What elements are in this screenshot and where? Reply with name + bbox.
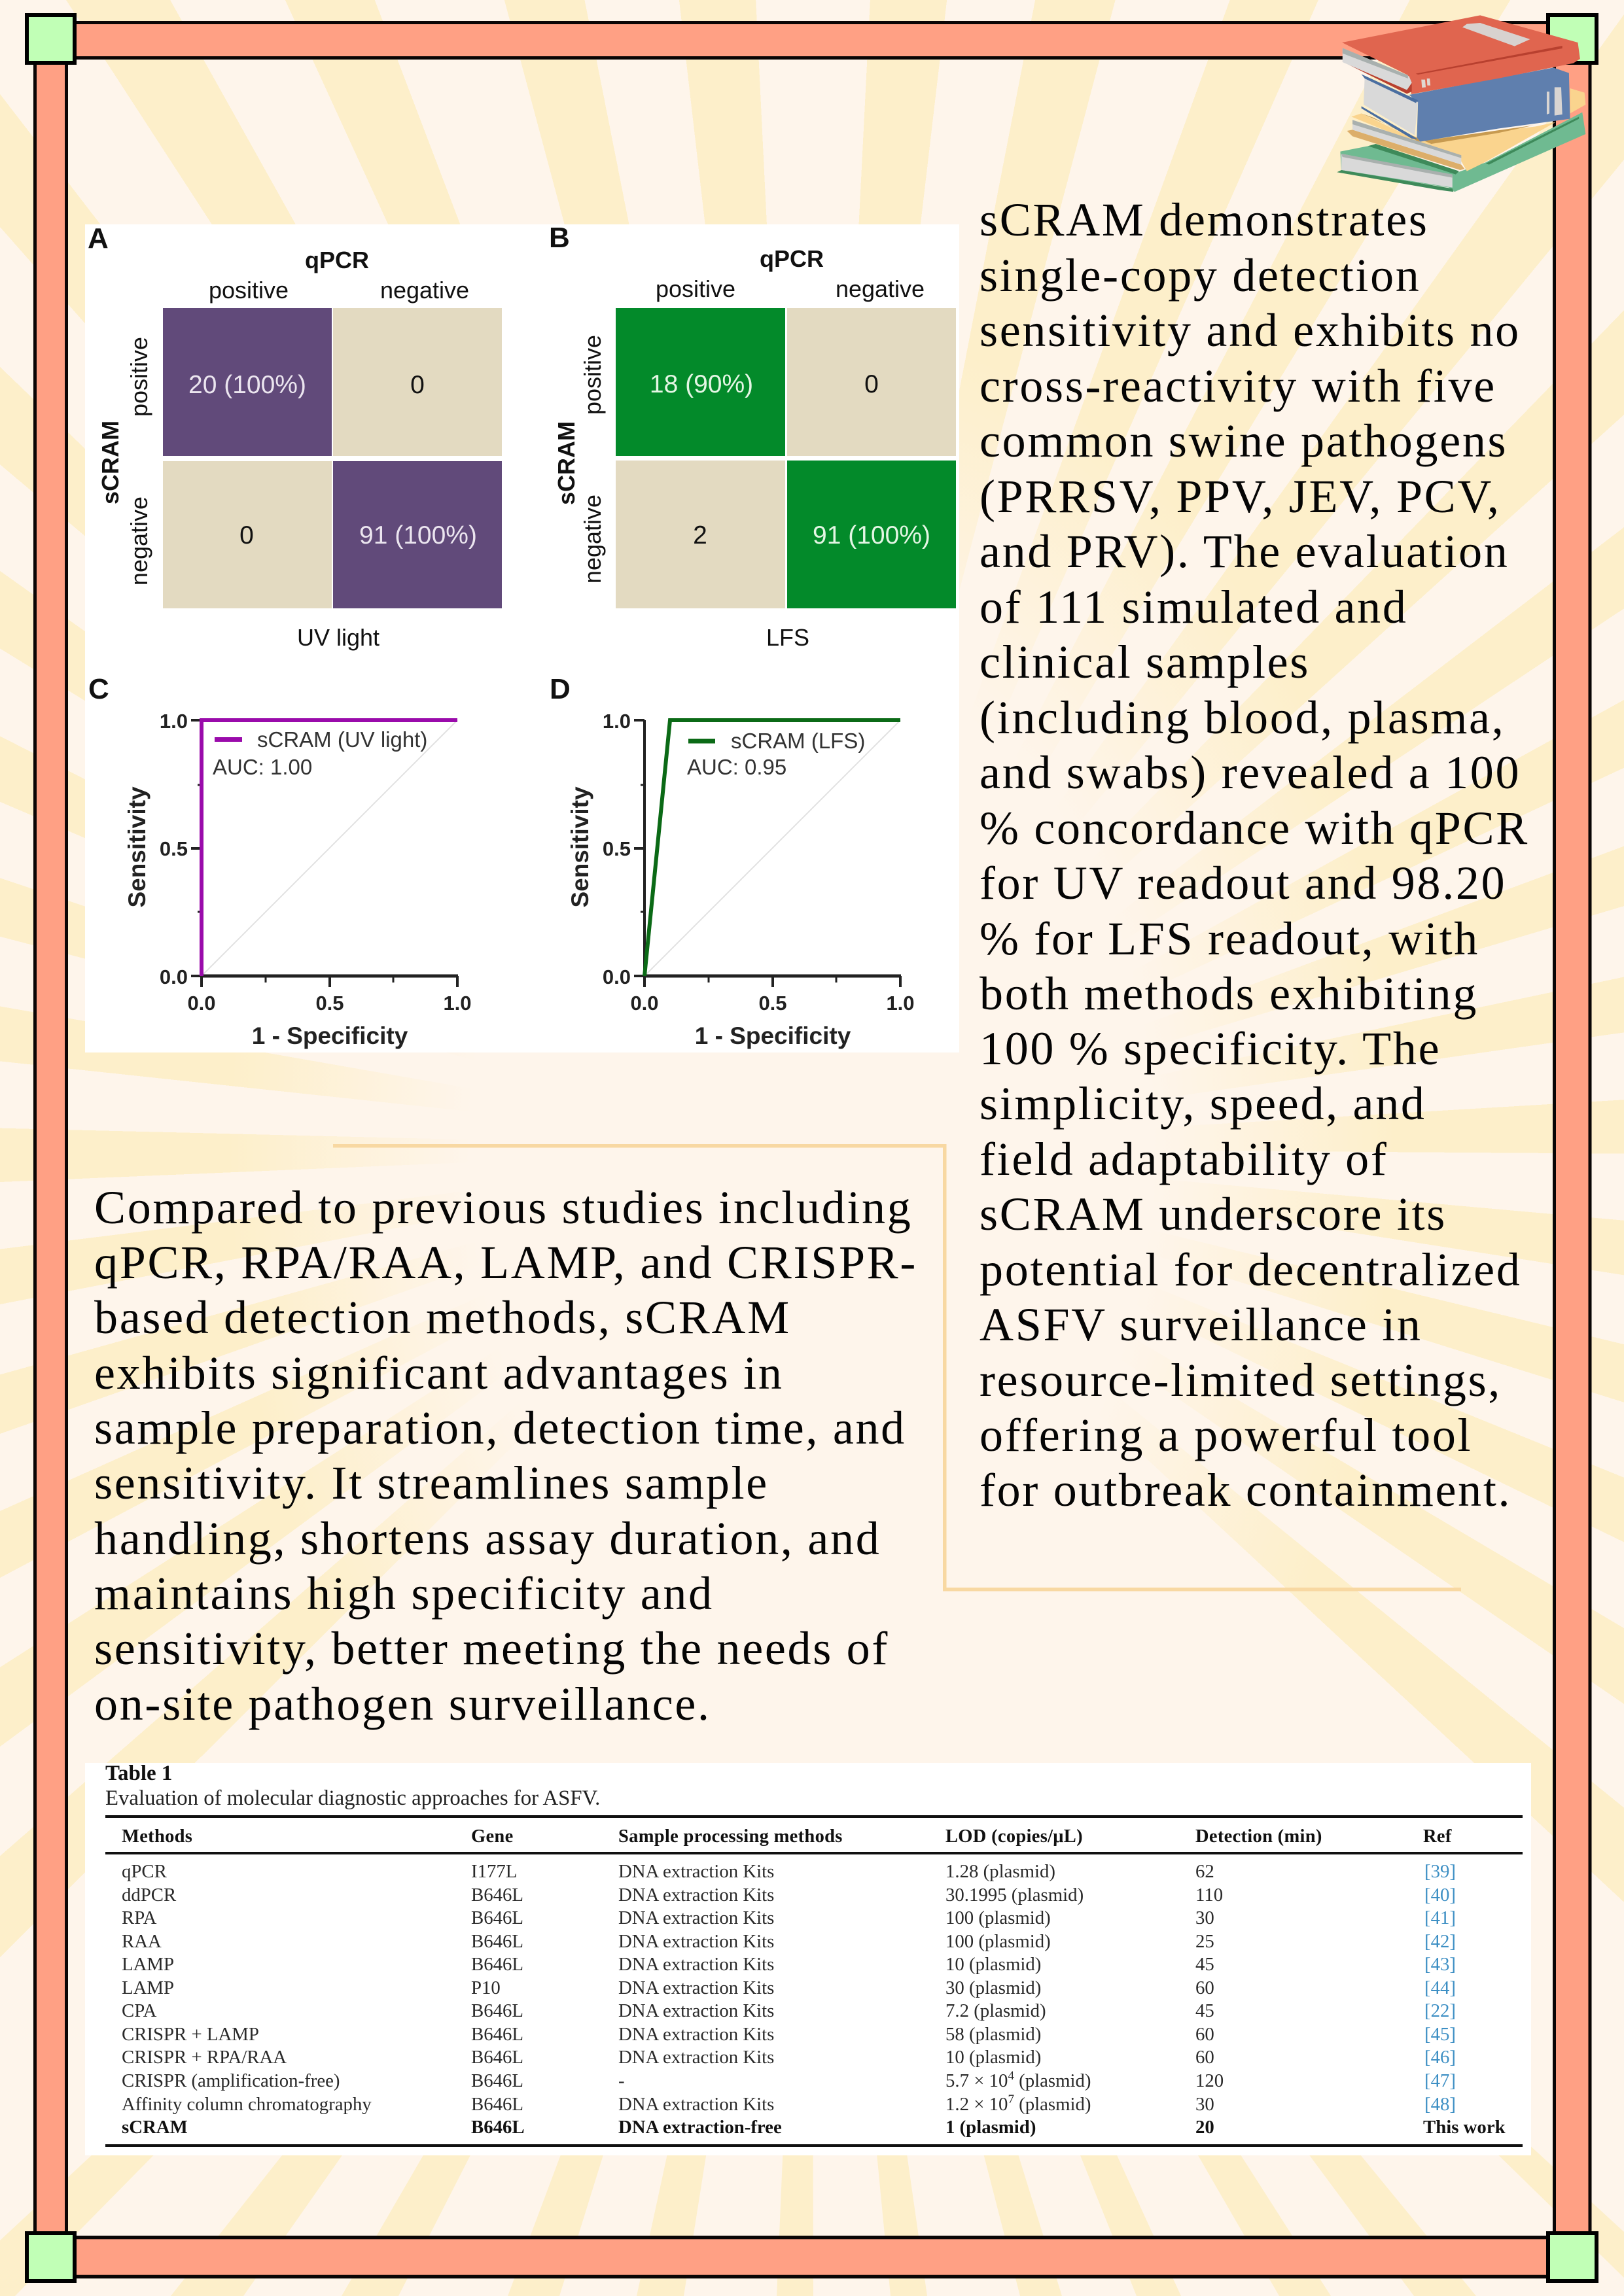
ROC chart D: sCRAM LFS: 1.0 <box>886 992 915 1015</box>
ROC chart D: sCRAM LFS: 0.0 <box>603 965 631 988</box>
table column: references: [47] <box>1424 2070 1456 2091</box>
heatmap B: LFS versus qPCR: negative <box>836 275 925 302</box>
text block: sCRAM performance summary: sensitivity and exhibits no <box>980 304 1521 357</box>
table column: LOD: 58 (plasmid) <box>945 2024 1041 2045</box>
text block: comparison with previous methods: handling, shortens assay duration, and <box>94 1512 881 1565</box>
table column: gene: B646L <box>471 2070 523 2091</box>
table column: gene: B646L <box>471 1931 523 1952</box>
ROC chart C: sCRAM UV light: 0.5 <box>315 992 344 1015</box>
table row: sCRAM this work: 20 <box>1195 2117 1214 2138</box>
heatmap B: LFS versus qPCR: 18 (90%) <box>650 370 753 398</box>
table column: references: [41] <box>1424 1907 1456 1928</box>
ROC chart C: sCRAM UV light: 0.0 <box>160 965 188 988</box>
panel: concordance heatmaps and ROC curves <box>85 222 959 1052</box>
ROC chart D: sCRAM LFS: 0.5 <box>603 837 631 860</box>
table row: sCRAM this work: 1 (plasmid) <box>945 2117 1036 2138</box>
text block: comparison with previous methods: sensitivity, better meeting the needs of <box>94 1622 889 1675</box>
table column: detection time <box>1195 1861 1224 2115</box>
heatmap B: LFS versus qPCR: LFS <box>766 624 809 651</box>
table column: LOD: (plasmid) <box>1014 2070 1091 2091</box>
text block: sCRAM performance summary: offering a powerful tool <box>980 1409 1472 1461</box>
text block: sCRAM performance summary: for outbreak containment. <box>980 1464 1511 1516</box>
table column: gene: B646L <box>471 1954 523 1975</box>
table column: gene: B646L <box>471 2094 523 2115</box>
heatmap A: UV light versus qPCR: positive <box>209 277 289 304</box>
text block: comparison with previous methods: sample preparation, detection time, and <box>94 1402 906 1454</box>
text block: sCRAM performance summary: resource-limited settings, <box>980 1354 1502 1406</box>
table column: LOD <box>945 1861 1091 2115</box>
heatmap B: LFS versus qPCR: sCRAM <box>553 421 580 505</box>
text block: sCRAM performance summary <box>980 194 1529 1516</box>
heatmap B: LFS versus qPCR: 91 (100%) <box>813 521 930 549</box>
heatmap B: LFS versus qPCR: B <box>549 222 570 254</box>
table column: gene: B646L <box>471 2024 523 2045</box>
table column: references: [22] <box>1424 2000 1456 2021</box>
text block: sCRAM performance summary: % concordance with qPCR <box>980 802 1529 854</box>
heatmap A: UV light versus qPCR: positive <box>126 337 152 417</box>
text block: comparison with previous methods: qPCR, RPA/RAA, LAMP, and CRISPR- <box>94 1236 917 1289</box>
table column: sample processing: DNA extraction Kits <box>618 1931 774 1952</box>
heatmap A: UV light versus qPCR: 91 (100%) <box>359 521 477 549</box>
table column: methods: ddPCR <box>122 1885 177 1905</box>
text block: sCRAM performance summary: cross-reactivity with five <box>980 360 1496 412</box>
table column: references: [44] <box>1424 1977 1456 1998</box>
table column: LOD: 7 <box>1008 2093 1014 2106</box>
ROC chart C: sCRAM UV light: sCRAM (UV light) <box>257 727 427 752</box>
table column: detection time: 30 <box>1195 1907 1214 1928</box>
table column: LOD: 4 <box>1008 2069 1014 2083</box>
ROC chart C: sCRAM UV light: 0.0 <box>187 992 216 1015</box>
connector: orange bracket lines between text blocks <box>333 1144 1461 1591</box>
heatmap B: LFS versus qPCR: positive <box>656 275 735 302</box>
text block: comparison with previous methods <box>94 1181 917 1730</box>
table column: LOD: 100 (plasmid) <box>945 1931 1051 1952</box>
ROC chart C: sCRAM UV light: Sensitivity <box>124 786 150 908</box>
table header row: Methods <box>122 1826 192 1847</box>
table header row: LOD (copies/μL) <box>945 1826 1083 1847</box>
table column: detection time: 120 <box>1195 2070 1224 2091</box>
table column: LOD: 1.2 × 10 <box>945 2094 1008 2115</box>
table header row: Gene <box>471 1826 514 1847</box>
heatmap A: UV light versus qPCR: A <box>88 222 109 254</box>
ROC chart C: sCRAM UV light: C <box>88 673 109 705</box>
table column: gene: B646L <box>471 2000 523 2021</box>
text block: sCRAM performance summary: both methods exhibiting <box>980 967 1478 1020</box>
table column: references: [45] <box>1424 2024 1456 2045</box>
heatmap B: LFS versus qPCR: 2 <box>693 521 707 549</box>
heatmap A: UV light versus qPCR <box>88 222 502 651</box>
table column: detection time: 60 <box>1195 2047 1214 2068</box>
table column: methods: LAMP <box>122 1954 174 1975</box>
table column: gene: B646L <box>471 1885 523 1905</box>
text block: sCRAM performance summary: 100 % specificity. The <box>980 1022 1441 1075</box>
table column: gene: P10 <box>471 1977 501 1998</box>
ROC chart D: sCRAM LFS: 1.0 <box>603 710 631 733</box>
table header row: Sample processing methods <box>618 1826 843 1847</box>
table column: detection time: 45 <box>1195 1954 1214 1975</box>
table column: LOD: (plasmid) <box>1014 2094 1091 2115</box>
table column: methods <box>122 1861 372 2115</box>
table column: sample processing: DNA extraction Kits <box>618 1861 774 1882</box>
text block: sCRAM performance summary: potential for decentralized <box>980 1244 1522 1296</box>
text block: comparison with previous methods: on-site pathogen surveillance. <box>94 1678 711 1730</box>
table column: gene: I177L <box>471 1861 517 1882</box>
heatmap A: UV light versus qPCR: 0 <box>239 521 254 549</box>
text block: sCRAM performance summary: % for LFS readout, with <box>980 913 1479 965</box>
table column: methods: CPA <box>122 2000 157 2021</box>
table column: gene: B646L <box>471 1907 523 1928</box>
ROC chart D: sCRAM LFS: Sensitivity <box>567 786 593 908</box>
table column: LOD: 7.2 (plasmid) <box>945 2000 1046 2021</box>
table column: LOD: 30.1995 (plasmid) <box>945 1885 1084 1905</box>
table column: gene: B646L <box>471 2047 523 2068</box>
table column: LOD: 5.7 × 10 <box>945 2070 1008 2091</box>
table column: methods: CRISPR + LAMP <box>122 2024 259 2045</box>
table column: detection time: 25 <box>1195 1931 1214 1952</box>
heatmap A: UV light versus qPCR: negative <box>126 496 152 585</box>
table row: sCRAM this work: This work <box>1423 2117 1506 2138</box>
text block: comparison with previous methods: based detection methods, sCRAM <box>94 1291 791 1344</box>
text block: sCRAM performance summary: of 111 simulated and <box>980 581 1408 633</box>
table column: sample processing: DNA extraction Kits <box>618 1977 774 1998</box>
table column: references: [40] <box>1424 1885 1456 1905</box>
text block: sCRAM performance summary: and swabs) revealed a 100 <box>980 746 1521 799</box>
table header row <box>122 1826 1452 1847</box>
table column: detection time: 62 <box>1195 1861 1214 1882</box>
table column: LOD: 10 (plasmid) <box>945 1954 1041 1975</box>
table column: references: [42] <box>1424 1931 1456 1952</box>
table row: sCRAM this work <box>122 2117 1506 2138</box>
table column: sample processing: DNA extraction Kits <box>618 1907 774 1928</box>
table title: Table 1 <box>105 1762 172 1785</box>
text block: sCRAM performance summary: field adaptability of <box>980 1133 1388 1185</box>
text block: sCRAM performance summary: single-copy detection <box>980 249 1421 302</box>
table column: LOD: 10 (plasmid) <box>945 2047 1041 2068</box>
table title: Evaluation of molecular diagnostic approaches for ASFV. <box>105 1786 600 1810</box>
icon: stack of books <box>1337 15 1585 192</box>
text block: sCRAM performance summary: for UV readout and 98.20 <box>980 857 1506 909</box>
table column: LOD: 30 (plasmid) <box>945 1977 1041 1998</box>
heatmap B: LFS versus qPCR: qPCR <box>760 245 824 272</box>
panel: Table 1 evaluation of molecular diagnostic approaches <box>85 1762 1531 2155</box>
table column: methods: Affinity column chromatography <box>122 2094 372 2115</box>
table column: methods: qPCR <box>122 1861 168 1882</box>
table column: sample processing: DNA extraction Kits <box>618 2094 774 2115</box>
table header row: Detection (min) <box>1195 1826 1322 1847</box>
heatmap A: UV light versus qPCR: 20 (100%) <box>188 371 306 399</box>
table column: detection time: 110 <box>1195 1885 1223 1905</box>
text block: sCRAM performance summary: sCRAM demonstrates <box>980 194 1429 246</box>
heatmap A: UV light versus qPCR: UV light <box>297 624 380 651</box>
heatmap A: UV light versus qPCR: 0 <box>410 371 425 399</box>
table column: methods: CRISPR (amplification-free) <box>122 2070 340 2091</box>
heatmap A: UV light versus qPCR: qPCR <box>305 247 369 273</box>
ROC chart C: sCRAM UV light: 1 - Specificity <box>252 1022 408 1049</box>
table column: sample processing <box>618 1861 774 2115</box>
table column: sample processing: DNA extraction Kits <box>618 1954 774 1975</box>
table column: methods: RAA <box>122 1931 162 1952</box>
heatmap B: LFS versus qPCR <box>549 222 956 651</box>
table column: references: [39] <box>1424 1861 1456 1882</box>
table column: sample processing: - <box>618 2070 625 2091</box>
heatmap B: LFS versus qPCR: positive <box>579 335 606 415</box>
ROC chart D: sCRAM LFS <box>550 673 915 1049</box>
table column: detection time: 60 <box>1195 2024 1214 2045</box>
ROC chart D: sCRAM LFS: 1 - Specificity <box>695 1022 851 1049</box>
text block: sCRAM performance summary: common swine pathogens <box>980 415 1508 467</box>
table column: LOD: 1.28 (plasmid) <box>945 1861 1055 1882</box>
text block: comparison with previous methods: exhibits significant advantages in <box>94 1347 784 1399</box>
table column: LOD: 100 (plasmid) <box>945 1907 1051 1928</box>
text block: sCRAM performance summary: (including blood, plasma, <box>980 691 1505 744</box>
table column: sample processing: DNA extraction Kits <box>618 2000 774 2021</box>
table column: detection time: 30 <box>1195 2094 1214 2115</box>
heatmap A: UV light versus qPCR: negative <box>380 277 469 304</box>
table header row: Ref <box>1423 1826 1452 1847</box>
table column: detection time: 60 <box>1195 1977 1214 1998</box>
ROC chart C: sCRAM UV light: 1.0 <box>160 710 188 733</box>
table column: detection time: 45 <box>1195 2000 1214 2021</box>
table column: references: [43] <box>1424 1954 1456 1975</box>
heatmap B: LFS versus qPCR: negative <box>579 495 606 583</box>
ROC chart C: sCRAM UV light: 0.5 <box>160 837 188 860</box>
table column: references: [48] <box>1424 2094 1456 2115</box>
table row: sCRAM this work: DNA extraction-free <box>618 2117 782 2138</box>
ROC chart D: sCRAM LFS: AUC: 0.95 <box>687 755 786 779</box>
ROC chart C: sCRAM UV light: 1.0 <box>443 992 472 1015</box>
heatmap A: UV light versus qPCR: sCRAM <box>97 421 124 504</box>
text block: sCRAM performance summary: sCRAM underscore its <box>980 1188 1447 1240</box>
text block: sCRAM performance summary: ASFV surveillance in <box>980 1298 1422 1351</box>
table column: methods: RPA <box>122 1907 157 1928</box>
table column: gene <box>471 1861 523 2115</box>
ROC chart D: sCRAM LFS: 0.5 <box>758 992 787 1015</box>
text block: comparison with previous methods: sensitivity. It streamlines sample <box>94 1457 769 1509</box>
table column: sample processing: DNA extraction Kits <box>618 2024 774 2045</box>
ROC chart C: sCRAM UV light <box>88 673 472 1049</box>
text block: sCRAM performance summary: clinical samples <box>980 636 1310 688</box>
ROC chart D: sCRAM LFS: sCRAM (LFS) <box>731 729 865 753</box>
text block: sCRAM performance summary: and PRV). The evaluation <box>980 525 1509 578</box>
table column: references <box>1424 1861 1456 2115</box>
text block: sCRAM performance summary: (PRRSV, PPV, JEV, PCV, <box>980 470 1501 523</box>
heatmap B: LFS versus qPCR: 0 <box>864 370 879 398</box>
table column: methods: CRISPR + RPA/RAA <box>122 2047 287 2068</box>
text block: comparison with previous methods: maintains high specificity and <box>94 1567 714 1620</box>
ROC chart D: sCRAM LFS: 0.0 <box>630 992 659 1015</box>
table row: sCRAM this work: sCRAM <box>122 2117 188 2138</box>
text block: comparison with previous methods: Compared to previous studies including <box>94 1181 912 1234</box>
table row: sCRAM this work: B646L <box>471 2117 525 2138</box>
ROC chart D: sCRAM LFS: D <box>550 673 571 705</box>
table column: sample processing: DNA extraction Kits <box>618 2047 774 2068</box>
text block: sCRAM performance summary: simplicity, speed, and <box>980 1077 1426 1130</box>
table column: methods: LAMP <box>122 1977 174 1998</box>
ROC chart C: sCRAM UV light: AUC: 1.00 <box>213 755 312 779</box>
table title <box>105 1762 600 1810</box>
table column: sample processing: DNA extraction Kits <box>618 1885 774 1905</box>
table column: references: [46] <box>1424 2047 1456 2068</box>
